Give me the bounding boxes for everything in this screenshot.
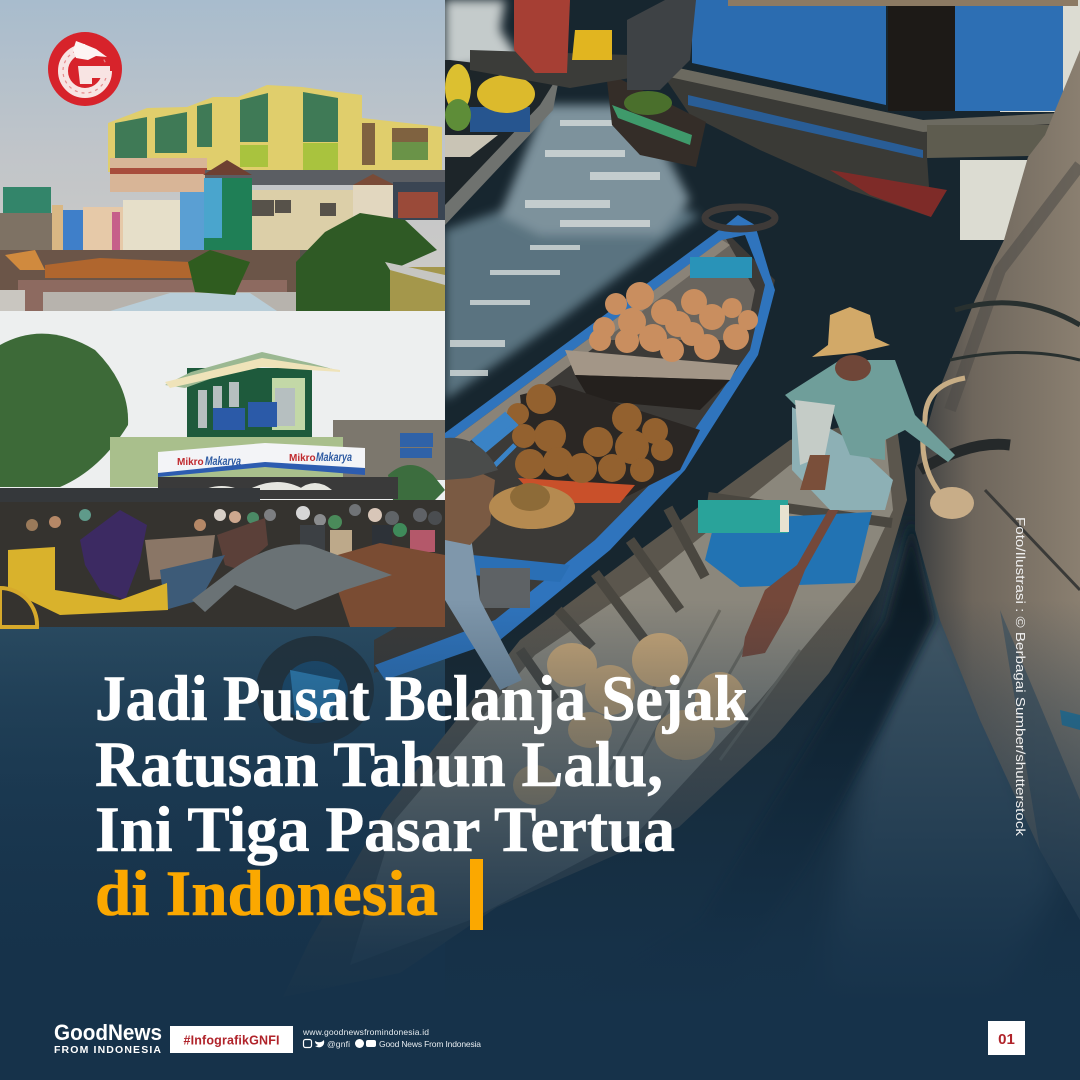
boat: small boats with bananas and vendors	[445, 0, 706, 225]
yellow carriage seat	[8, 547, 168, 615]
title: Ini Tiga Pasar Tertua	[95, 794, 675, 866]
boat: top blue houseboat	[655, 0, 1080, 217]
distant roof	[333, 420, 445, 480]
tree	[0, 334, 128, 487]
dark fade overlay	[0, 600, 1080, 1080]
page number	[988, 1021, 1025, 1055]
coconuts lower	[507, 384, 673, 483]
person: man with straw hat and denim jacket	[445, 438, 575, 690]
footer links and social icons: Good News From Indonesia	[379, 1039, 481, 1049]
horse right	[327, 543, 445, 627]
grey carriage hood	[192, 544, 392, 612]
page number: 01	[998, 1031, 1015, 1048]
person: seated boatman with hat	[785, 307, 955, 510]
footer links and social icons: www.goodnewsfromindonesia.id	[302, 1027, 429, 1037]
photo: street market with horse carriages	[0, 311, 445, 627]
title accent bar	[470, 859, 483, 930]
boat: coconut boat	[374, 207, 775, 680]
seated horse and driver	[217, 518, 268, 570]
cargo tarp blue	[705, 512, 872, 587]
market banner: Mikro Makarya	[158, 443, 365, 477]
title: di Indonesia	[95, 858, 438, 930]
person in purple batik	[80, 510, 147, 600]
log raft	[915, 50, 1080, 920]
title: Ratusan Tahun Lalu,	[95, 729, 663, 801]
market banner: Mikro Makarya: Mikro	[289, 453, 316, 464]
middle row of shops	[110, 158, 207, 192]
footer links and social icons	[302, 1027, 481, 1049]
tyre bumper at bow	[705, 207, 775, 229]
umbrellas	[195, 482, 332, 494]
crowd	[0, 500, 445, 627]
title	[95, 663, 749, 930]
market banner: Mikro Makarya: Makarya	[316, 450, 352, 464]
paddle	[742, 467, 861, 657]
footer brand: GoodNews	[54, 1020, 162, 1056]
photo credit: Foto/Ilustrasi : © Berbagai Sumber/shutterstock	[1013, 517, 1028, 837]
footer brand: GoodNews: GoodNews	[54, 1020, 162, 1045]
footer brand: GoodNews: FROM INDONESIA	[54, 1044, 161, 1056]
yellow building	[108, 85, 442, 172]
footer links and social icons: @gnfi	[327, 1039, 350, 1049]
photo: shopping building under sky	[0, 0, 445, 311]
boat: grey wooden boat	[283, 413, 907, 997]
roofs, tin and trees	[0, 250, 300, 311]
palm	[388, 465, 445, 510]
title: Jadi Pusat Belanja Sejak	[95, 663, 749, 735]
carriage roof	[0, 488, 260, 502]
sacks	[513, 633, 745, 805]
logo: red round emblem	[48, 32, 122, 106]
market banner: Mikro Makarya: Mikro	[177, 457, 204, 468]
market banner: Mikro Makarya: Makarya	[205, 454, 241, 468]
market clock tower	[110, 352, 343, 487]
coconuts upper	[589, 282, 758, 362]
tyre bumper with blue cloth	[256, 636, 374, 744]
footer hashtag	[170, 1026, 293, 1053]
footer hashtag: #InfografikGNFI	[184, 1034, 280, 1048]
water sheen	[445, 0, 1080, 1000]
